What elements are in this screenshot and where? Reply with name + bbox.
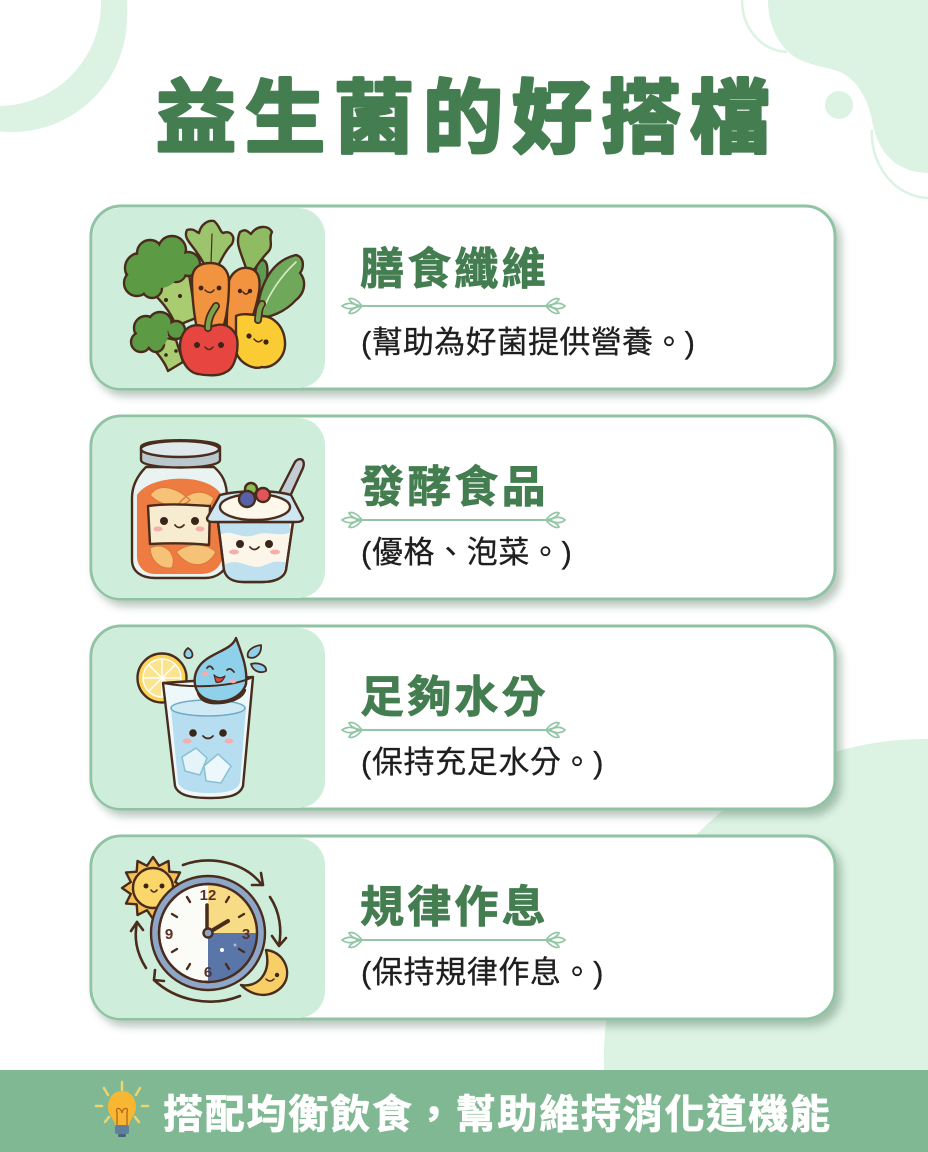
heading: 規律作息 <box>360 883 549 932</box>
icon panel <box>93 628 325 808</box>
description: (幫助為好菌提供營養。) <box>361 325 695 360</box>
icon: light bulb <box>96 1082 148 1137</box>
ornament divider <box>342 933 565 947</box>
icon: clock with sun and moon: 6 <box>204 964 212 981</box>
icon: vegetables <box>124 221 304 375</box>
description: (優格、泡菜。) <box>361 535 572 570</box>
card frame <box>91 626 835 809</box>
heading: 足夠水分 <box>360 673 549 722</box>
ornament divider <box>342 513 565 527</box>
icon: clock with sun and moon <box>122 857 287 1002</box>
decoration: bottom-right blob <box>604 739 928 1070</box>
icon: clock with sun and moon: 3 <box>242 926 250 943</box>
ornament divider <box>342 299 565 313</box>
icon panel <box>93 208 325 388</box>
card frame <box>91 206 835 389</box>
decoration: top-left ring <box>0 0 127 132</box>
heading: 膳食纖維 <box>360 245 549 294</box>
footer banner <box>0 1070 928 1152</box>
card: dietary fibre <box>91 206 835 389</box>
icon: glass of water <box>138 638 266 798</box>
description: (保持規律作息。) <box>361 955 604 990</box>
card: regular routine <box>91 836 835 1019</box>
heading: 發酵食品 <box>360 463 549 512</box>
card: fermented foods <box>91 416 835 599</box>
title: 益生菌的好搭檔 <box>156 74 779 163</box>
card frame <box>91 836 835 1019</box>
icon: clock with sun and moon: 12 <box>200 887 216 904</box>
card frame <box>91 416 835 599</box>
icon: clock with sun and moon: 9 <box>165 926 173 943</box>
description: (保持充足水分。) <box>361 745 604 780</box>
icon panel <box>93 418 325 598</box>
decoration: top-right blob <box>742 0 928 198</box>
icon panel <box>93 838 325 1018</box>
banner background <box>0 1070 928 1152</box>
icon: kimchi jar and yogurt <box>132 440 304 582</box>
card: enough water <box>91 626 835 809</box>
ornament divider <box>342 723 565 737</box>
banner text: 搭配均衡飲食，幫助維持消化道機能 <box>163 1093 832 1137</box>
